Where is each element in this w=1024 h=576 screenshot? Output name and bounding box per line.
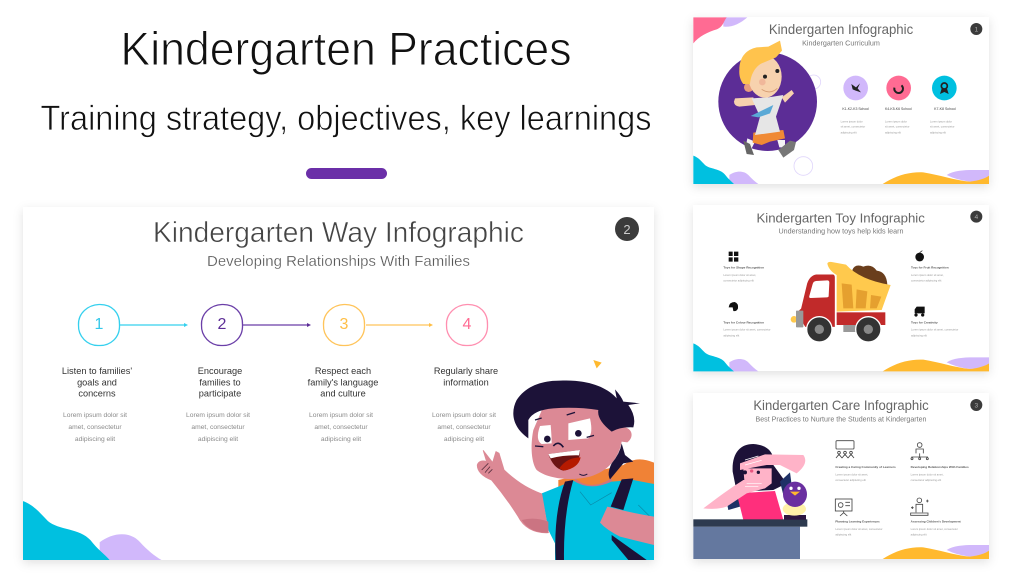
step 2: participate xyxy=(199,388,241,398)
step 4: 4 xyxy=(463,316,472,333)
heading: Kindergarten Toy Infographic xyxy=(756,210,925,225)
step 1: amet, consectetur xyxy=(68,424,122,431)
level 2: sit amet, consectetur xyxy=(885,125,910,129)
step 2: families to xyxy=(199,378,241,388)
level 1: K1-K2-K3 School xyxy=(842,107,869,111)
item: shape recognition: Toys for Shape Recognition xyxy=(723,265,764,269)
step 4: information xyxy=(443,378,489,388)
level 1: sit amet, consectetur xyxy=(841,125,865,129)
step 2: adipiscing elit xyxy=(198,436,238,443)
item: relationships with families xyxy=(911,443,969,482)
item: relationships with families: consectetur adipiscing elit xyxy=(911,478,941,482)
level 1: adipiscing elit xyxy=(841,130,857,134)
item: creativity: Lorem ipsum dolor sit amet, consectetur xyxy=(911,327,958,331)
step 1: Listen to families' xyxy=(62,366,132,376)
item: colour recognition: Toys for Colour Recognition xyxy=(723,320,764,324)
item: shape recognition xyxy=(723,252,764,283)
step 3: and culture xyxy=(320,388,366,398)
item: caring community: consectetur adipiscing elit xyxy=(835,478,866,482)
page number badge xyxy=(970,23,982,35)
step 2: Lorem ipsum dolor sit xyxy=(186,412,250,419)
step 3: family's language xyxy=(308,378,378,388)
page number badge xyxy=(970,211,982,223)
panel: Kindergarten Way Infographic xyxy=(23,207,654,560)
item: caring community: Creating a Caring Community of Learners xyxy=(835,465,896,469)
step 2: 2 xyxy=(218,316,227,333)
page number badge xyxy=(970,399,982,411)
level 1 xyxy=(841,76,869,134)
step 3 xyxy=(308,304,433,443)
step 1 xyxy=(62,304,188,443)
item: colour recognition: Lorem ipsum dolor sit amet, consectetur xyxy=(723,327,771,331)
step 2: amet, consectetur xyxy=(191,424,245,431)
top left blobs xyxy=(693,17,747,43)
item: fruit recognition: Lorem ipsum dolor sit amet, xyxy=(911,273,944,277)
bottom left blobs xyxy=(693,343,758,371)
subheading: Best Practices to Nurture the Students at Kindergarten xyxy=(755,417,927,424)
item: shape recognition: Lorem ipsum dolor sit amet, xyxy=(723,273,756,277)
step 3: adipiscing elit xyxy=(321,436,361,443)
item: colour recognition: adipiscing elit xyxy=(723,333,740,337)
page number badge: 3 xyxy=(974,402,978,409)
step 2 xyxy=(186,304,311,443)
item: planning learning: Lorem ipsum dolor sit amet, consectetur xyxy=(835,527,883,531)
subheading: Understanding how toys help kids learn xyxy=(778,229,904,236)
step 4: Lorem ipsum dolor sit xyxy=(432,412,496,419)
bottom right blobs xyxy=(883,357,989,371)
level 3: K7-K8 School xyxy=(934,107,956,111)
slide contents xyxy=(693,17,989,184)
item: planning learning xyxy=(835,499,883,537)
main title: Kindergarten Practices xyxy=(120,22,572,75)
item: creativity: adipiscing elit xyxy=(911,333,927,337)
illustration: dump truck xyxy=(791,262,891,342)
step 3: Respect each xyxy=(315,366,371,376)
step 4: adipiscing elit xyxy=(444,436,484,443)
level 3: Lorem ipsum dolor xyxy=(930,119,952,123)
step 1: adipiscing elit xyxy=(75,436,115,443)
item: relationships with families: Developing Relationships With Families xyxy=(911,465,969,469)
panel: Kindergarten Care Infographic xyxy=(693,393,989,559)
item: assessing development: adipiscing elit xyxy=(911,533,927,537)
heading: Kindergarten Infographic xyxy=(769,21,913,37)
level 2: K4-K5-K6 School xyxy=(885,107,912,111)
slide contents xyxy=(693,398,989,559)
slide contents xyxy=(693,210,989,371)
item: fruit recognition: Toys for Fruit Recognition xyxy=(911,265,949,269)
item: assessing development: Assessing Children's Development xyxy=(911,520,961,524)
step 2: Encourage xyxy=(198,366,242,376)
illustration: boy with backpack pointing xyxy=(477,360,654,560)
panel heading: Kindergarten Way Infographic xyxy=(153,217,524,249)
heading: Kindergarten Care Infographic xyxy=(753,398,929,413)
step 1: goals and xyxy=(77,378,117,388)
item: fruit recognition xyxy=(911,251,949,283)
illustration: running blond boy xyxy=(734,41,796,158)
purple accent pill xyxy=(306,168,387,179)
panel: Kindergarten Infographic xyxy=(693,17,989,184)
item: planning learning: adipiscing elit xyxy=(835,533,852,537)
page number badge: 2 xyxy=(623,222,631,237)
subheading: Kindergarten Curriculum xyxy=(802,39,880,48)
step 4: amet, consectetur xyxy=(437,424,491,431)
item: colour recognition xyxy=(723,302,771,337)
step 3: amet, consectetur xyxy=(314,424,368,431)
step 3: 3 xyxy=(340,316,349,333)
step 1: Lorem ipsum dolor sit xyxy=(63,412,127,419)
level 2: adipiscing elit xyxy=(885,130,901,134)
page number badge: 4 xyxy=(974,214,978,221)
step 4: Regularly share xyxy=(434,366,498,376)
purple circle xyxy=(718,52,817,151)
item: relationships with families: Lorem ipsum dolor sit amet, xyxy=(911,472,944,476)
step 1: 1 xyxy=(95,316,104,333)
panel: Kindergarten Toy Infographic xyxy=(693,205,989,371)
level 1: Lorem ipsum dolor xyxy=(841,119,863,123)
level 2: Lorem ipsum dolor xyxy=(885,119,907,123)
item: caring community: Lorem ipsum dolor sit amet, xyxy=(835,472,868,476)
item: fruit recognition: consectetur adipiscing elit xyxy=(911,279,942,283)
panel subheading: Developing Relationships With Families xyxy=(207,253,470,270)
bottom left blobs xyxy=(693,156,758,184)
item: caring community xyxy=(835,441,896,482)
page number badge: 1 xyxy=(974,26,978,33)
step 3: Lorem ipsum dolor sit xyxy=(309,412,373,419)
bottom right blobs xyxy=(883,170,989,184)
level 3: sit amet, consectetur xyxy=(930,125,955,129)
level 3 xyxy=(930,76,957,134)
item: creativity xyxy=(911,307,958,337)
level 3: adipiscing elit xyxy=(930,130,946,134)
illustration: girl at desk with toy bird xyxy=(693,444,807,559)
item: shape recognition: consectetur adipiscing elit xyxy=(723,279,754,283)
step 1: concerns xyxy=(78,388,116,398)
page number badge xyxy=(615,217,639,241)
bottom right blobs xyxy=(883,545,989,559)
subtitle: Training strategy, objectives, key learnings xyxy=(40,99,652,138)
level 2 xyxy=(885,76,912,134)
outlined decorative circles xyxy=(794,75,821,175)
item: planning learning: Planning Learning Experiences xyxy=(835,520,880,524)
item: assessing development xyxy=(911,498,961,537)
decorative blobs bottom left xyxy=(23,501,161,560)
step 4 xyxy=(432,304,498,443)
item: assessing development: Lorem ipsum dolor sit amet, consectetur xyxy=(911,527,958,531)
item: creativity: Toys for Creativity xyxy=(911,320,938,324)
